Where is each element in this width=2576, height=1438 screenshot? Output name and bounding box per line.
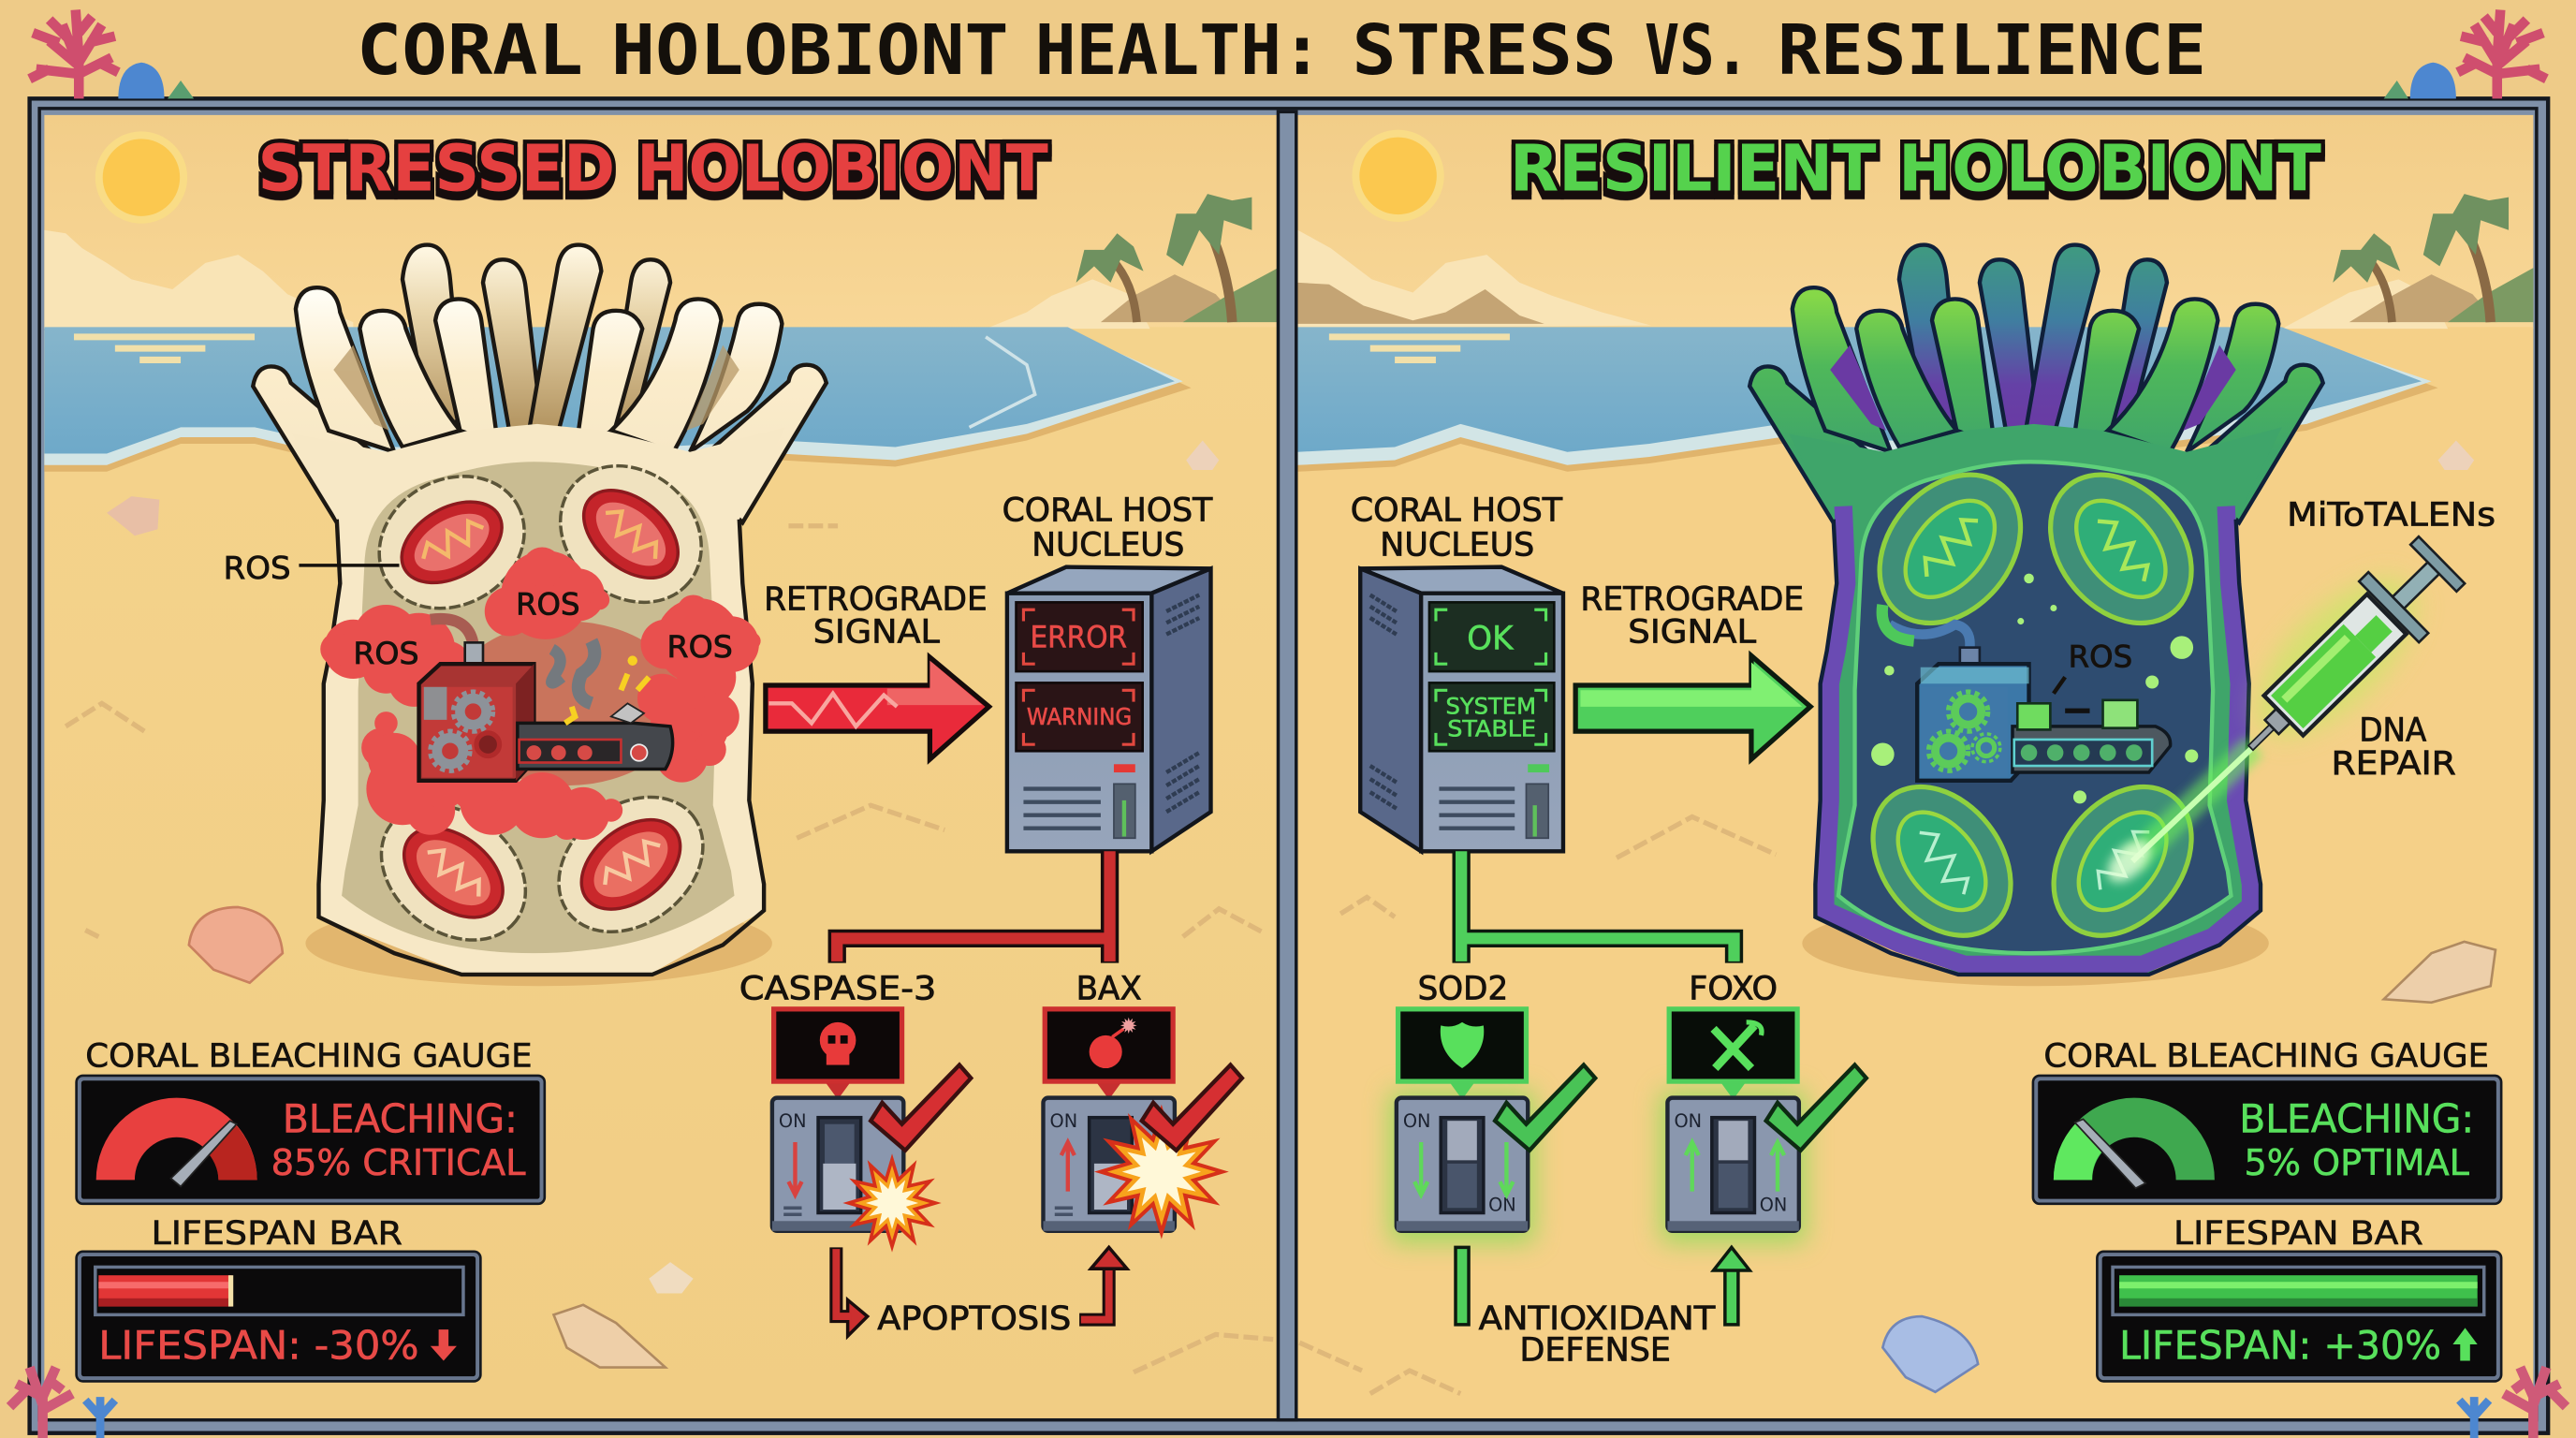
coral base shadow: [1802, 901, 2269, 986]
check mark: bax: [1142, 1065, 1242, 1151]
title: HOLOBIONT: [611, 11, 1009, 91]
mitochondrion: bottom left: [1845, 760, 2039, 962]
title: STRESS: [1352, 11, 1617, 91]
syringe glow: [2232, 553, 2441, 762]
lifespan bar: resilient: LIFESPAN BAR: [2174, 1214, 2423, 1253]
check mark: foxo: [1766, 1065, 1866, 1151]
nucleus label: NUCLEUS: [1380, 525, 1534, 564]
mitochondrion: top left: [355, 450, 549, 634]
coral bleaching gauge: resilient: BLEACHING:: [2239, 1095, 2474, 1141]
icon: bomb: [1090, 1018, 1137, 1068]
retrograde signal label: [1580, 580, 1804, 651]
switch: bax: ON: [1050, 1110, 1077, 1132]
connector fill: [837, 851, 1110, 961]
screen: error: ERROR: [1030, 622, 1127, 655]
label: dna repair: DNA: [2359, 712, 2426, 750]
screen: system stable: [1429, 682, 1554, 751]
coral base shadow: [305, 901, 772, 986]
palm trees: [2333, 194, 2509, 322]
switch: sod2: ON: [1488, 1195, 1516, 1216]
label: dna repair: REPAIR: [2331, 744, 2456, 783]
screen: system stable: SYSTEM: [1445, 694, 1536, 720]
title: [357, 11, 2206, 91]
left panel backdrop: [44, 115, 1278, 1418]
retrograde signal label: SIGNAL: [1628, 612, 1757, 651]
coral: back tentacles: [402, 245, 670, 431]
label: mitotalens: MiToTALENs: [2287, 496, 2496, 535]
ROS label: ROS: [2069, 641, 2132, 675]
ROS labels: inside: ROS: [516, 589, 580, 623]
screen: system stable: STABLE: [1447, 715, 1536, 741]
antioxidant defense pathway: [1456, 1247, 1749, 1369]
icon: sun: [1352, 130, 1444, 222]
switch: foxo: ON: [1674, 1110, 1702, 1132]
gauge dial: [2054, 1098, 2215, 1188]
icon: shield: [1441, 1022, 1484, 1068]
corner coral: bottom left: [10, 1368, 115, 1438]
mitochondrion: bottom right: [533, 770, 729, 960]
explosion: caspase-3: [842, 1153, 942, 1253]
mitochondrion: bottom left: [355, 777, 552, 968]
ROS labels: inside: [353, 589, 733, 671]
tentacle shading: [333, 345, 739, 431]
retrograde signal label: SIGNAL: [813, 612, 940, 651]
coral bleaching gauge: resilient: CORAL BLEACHING GAUGE: [2043, 1036, 2489, 1075]
ROS labels: inside: ROS: [667, 631, 733, 665]
sparkles: [1871, 574, 2198, 803]
palm trees: [1076, 194, 1251, 322]
syringe: [2221, 530, 2472, 778]
mitochondrion: top left: [1851, 447, 2049, 651]
connector: nucleus to switches: [1461, 851, 1734, 963]
corner coral: bottom right: [2459, 1368, 2566, 1438]
icon: sun: [95, 131, 187, 224]
ROS label: [2054, 641, 2132, 694]
gene: sod2: SOD2: [1418, 969, 1508, 1007]
apoptosis pathway: APOPTOSIS: [877, 1299, 1071, 1338]
check mark: sod2: [1495, 1065, 1595, 1151]
icon: skull: [820, 1022, 856, 1065]
title: VS.: [1645, 11, 1749, 91]
switch: caspase-3: [772, 1098, 903, 1231]
coral: bleached body: [292, 424, 785, 975]
title: HEALTH:: [1035, 11, 1323, 91]
gauge dial: [96, 1098, 257, 1186]
gene: foxo: [1669, 969, 1797, 1099]
switch: caspase-3: ON: [779, 1110, 807, 1132]
lifespan bar: resilient: LIFESPAN: +30%: [2119, 1323, 2441, 1369]
mitochondrion: top right: [2022, 447, 2220, 651]
coral bleaching gauge: stressed: CORAL BLEACHING GAUGE: [85, 1036, 533, 1075]
gene: caspase-3: [739, 969, 936, 1099]
repaired factory: [1882, 605, 2171, 781]
server: coral host nucleus: [1360, 567, 1563, 851]
coral bleaching gauge: stressed: [77, 1036, 545, 1204]
gene: foxo: FOXO: [1689, 969, 1778, 1007]
heading: stressed holobiont: STRESSED HOLOBIONT: [258, 132, 1048, 207]
nucleus label: CORAL HOST: [1003, 491, 1213, 529]
lifespan bar: stressed: LIFESPAN BAR: [151, 1214, 402, 1253]
antioxidant defense pathway: DEFENSE: [1519, 1330, 1671, 1369]
gene: bax: [1045, 969, 1173, 1099]
server: coral host nucleus: [1007, 567, 1211, 851]
mitochondrion: bottom right: [2026, 760, 2219, 962]
title: CORAL: [357, 11, 583, 91]
label: dna repair: [2331, 712, 2456, 783]
coral: back tentacles: [1899, 245, 2167, 431]
sand details: [1299, 542, 2465, 1394]
screen: warning: [1017, 682, 1143, 751]
sand details: [66, 526, 1273, 1372]
nucleus label: [1351, 491, 1563, 564]
sea and shore: [1298, 327, 2438, 472]
panel: stressed holobiont: [44, 115, 1278, 1418]
coral: front tentacles: [253, 287, 827, 522]
explosion: bax: [1094, 1105, 1229, 1240]
switch: sod2: [1397, 1098, 1528, 1231]
ROS callout: ROS: [224, 550, 291, 586]
title: RESILIENCE: [1778, 11, 2206, 91]
screen: warning: WARNING: [1027, 703, 1132, 730]
ROS clouds: [320, 548, 761, 840]
gene: sod2: [1398, 969, 1526, 1099]
nucleus label: CORAL HOST: [1351, 491, 1563, 529]
coral bleaching gauge: resilient: 5% OPTIMAL: [2244, 1142, 2469, 1184]
heading: resilient holobiont: RESILIENT HOLOBIONT: [1510, 132, 2321, 207]
arrow: retrograde signal: [1575, 655, 1810, 759]
lifespan bar: stressed: [77, 1214, 480, 1381]
connector fill: [1461, 851, 1734, 961]
glow: switches: [1390, 1092, 1806, 1242]
retrograde signal label: RETROGRADE: [764, 580, 988, 618]
arrow: retrograde signal: [766, 657, 989, 759]
right panel backdrop: [1298, 115, 2533, 1418]
coral bleaching gauge: stressed: 85% CRITICAL: [271, 1142, 526, 1184]
coral: resilient body: [1789, 424, 2282, 975]
ROS labels: inside: ROS: [353, 638, 419, 671]
switch: bax: [1043, 1098, 1175, 1231]
gene: caspase-3: CASPASE-3: [739, 969, 936, 1007]
nucleus label: [1003, 491, 1213, 564]
panel: resilient holobiont: [1298, 115, 2533, 1418]
mitochondrion: top right: [533, 438, 729, 631]
decorative shells: [1882, 440, 2496, 1392]
screen: ok: OK: [1467, 619, 1514, 657]
retrograde signal label: [764, 580, 988, 651]
apoptosis pathway: [836, 1247, 1127, 1338]
screen: ok: [1429, 602, 1554, 671]
corner coral: top right: [2384, 10, 2546, 98]
corner coral: top left: [30, 10, 194, 98]
broken factory: [419, 619, 673, 781]
decorative shells: [107, 440, 1219, 1368]
coral bleaching gauge: stressed: BLEACHING:: [283, 1095, 518, 1141]
gene: bax: BAX: [1076, 969, 1142, 1007]
coral bleaching gauge: resilient: [2033, 1036, 2501, 1204]
syringe beam: [2100, 746, 2254, 890]
screen: error: [1017, 602, 1143, 671]
icon: tools: [1714, 1022, 1762, 1068]
lifespan bar: stressed: LIFESPAN: -30%: [98, 1323, 419, 1369]
connector: nucleus to switches: [837, 851, 1110, 963]
divider: [1278, 111, 1296, 1420]
switch: sod2: ON: [1403, 1110, 1430, 1132]
sea and shore: [44, 327, 1191, 472]
lifespan bar: resilient: [2097, 1214, 2501, 1381]
check mark: caspase-3: [871, 1065, 971, 1151]
nucleus label: NUCLEUS: [1032, 525, 1184, 564]
switch: foxo: [1667, 1098, 1799, 1231]
antioxidant defense pathway: ANTIOXIDANT: [1479, 1299, 1716, 1338]
switch: foxo: ON: [1760, 1195, 1787, 1216]
tentacle shading: [1830, 345, 2236, 431]
retrograde signal label: RETROGRADE: [1580, 580, 1804, 618]
coral: front tentacles: [1749, 287, 2323, 522]
